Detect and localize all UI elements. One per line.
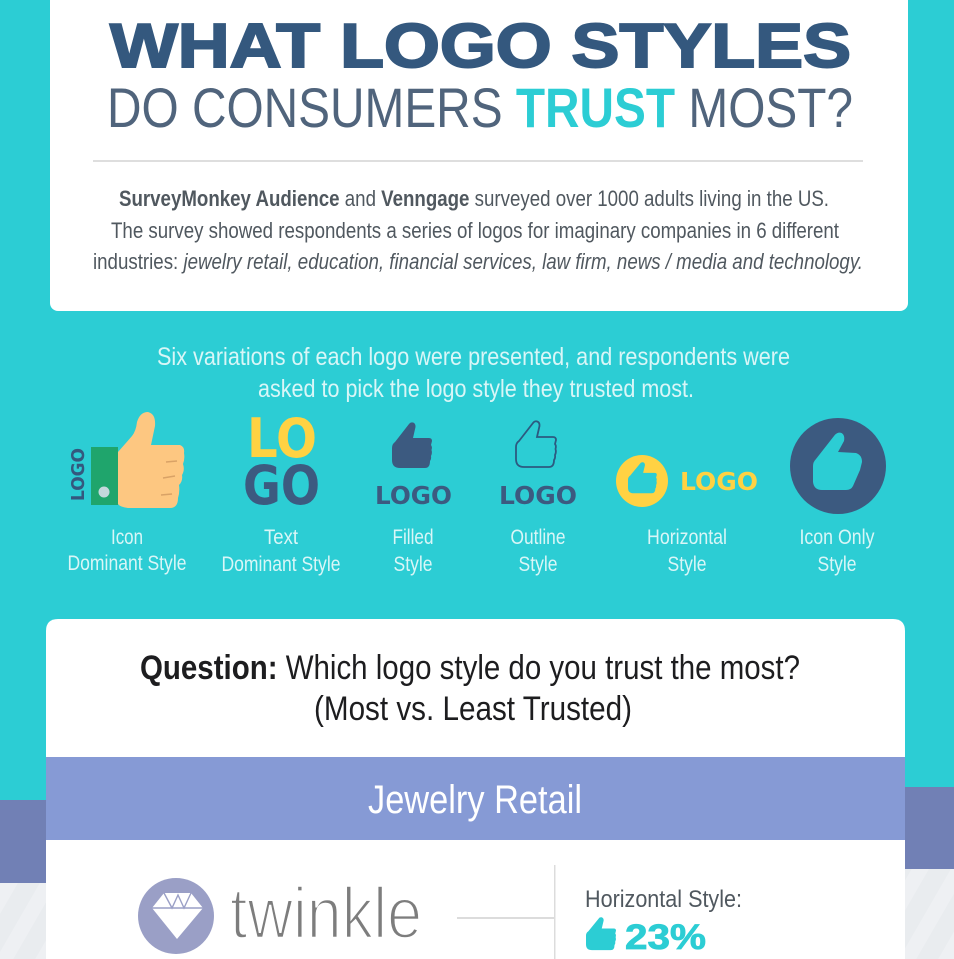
label: filled style: Filled (392, 526, 434, 549)
logo: text dominant style: GO (243, 454, 320, 517)
logo: horizontal style: LOGO (680, 467, 758, 496)
title: WHAT LOGO STYLES (110, 12, 851, 81)
logo: text dominant style: LO (247, 407, 317, 470)
label: icon dominant style (68, 526, 186, 575)
section band: jewelry retail: Jewelry Retail (368, 778, 582, 822)
logo: twinkle: twinkle (230, 874, 422, 954)
label: text dominant style (222, 526, 340, 576)
label: horizontal style: Horizontal (647, 526, 727, 549)
label: outline style (510, 526, 566, 576)
title (107, 12, 853, 139)
title: DO CONSUMERS TRUST MOST? (107, 76, 853, 139)
label: icon dominant style: Icon (111, 526, 143, 549)
logo: filled style (375, 422, 452, 510)
label: outline style: Outline (510, 526, 566, 549)
panel: question and results (46, 619, 905, 959)
label: text dominant style: Dominant Style (222, 553, 340, 576)
logo: icon dominant style: LOGO (68, 448, 89, 501)
intro text (93, 186, 863, 274)
subheading: asked to pick the logo style they trusted most. (258, 375, 694, 403)
logo: text dominant style (243, 407, 320, 517)
logo: filled style: LOGO (375, 481, 452, 510)
result: horizontal style: 23% (625, 918, 706, 957)
label: filled style: Style (394, 553, 432, 576)
connector line (457, 917, 554, 919)
result: horizontal style: Horizontal Style: (585, 886, 742, 913)
label: horizontal style: Style (668, 553, 706, 576)
intro text: SurveyMonkey Audience and Venngage surveyed over 1000 adults living in the US. (119, 186, 829, 211)
logo: outline style: LOGO (499, 481, 577, 510)
question heading (140, 649, 800, 728)
logo: icon only style (790, 418, 886, 514)
label: text dominant style: Text (264, 526, 298, 549)
logo: twinkle (138, 874, 422, 954)
label: icon only style: Icon Only (800, 526, 875, 549)
result: horizontal style (585, 886, 742, 957)
label: icon only style: Style (818, 553, 856, 576)
question heading: Question: Which logo style do you trust the most? (140, 649, 800, 687)
logo: horizontal style (616, 455, 758, 507)
logo: outline style (499, 421, 577, 510)
label: outline style: Style (518, 553, 558, 576)
subheading (157, 343, 790, 403)
logo: icon dominant style (68, 412, 184, 508)
subheading: Six variations of each logo were presented, and respondents were (157, 343, 790, 371)
label: filled style (392, 526, 434, 576)
question heading: (Most vs. Least Trusted) (314, 690, 632, 728)
panel: introduction (50, 0, 908, 311)
label: horizontal style (647, 526, 727, 576)
label: icon only style (800, 526, 875, 576)
label: icon dominant style: Dominant Style (68, 552, 186, 575)
section band: jewelry retail (46, 757, 905, 840)
